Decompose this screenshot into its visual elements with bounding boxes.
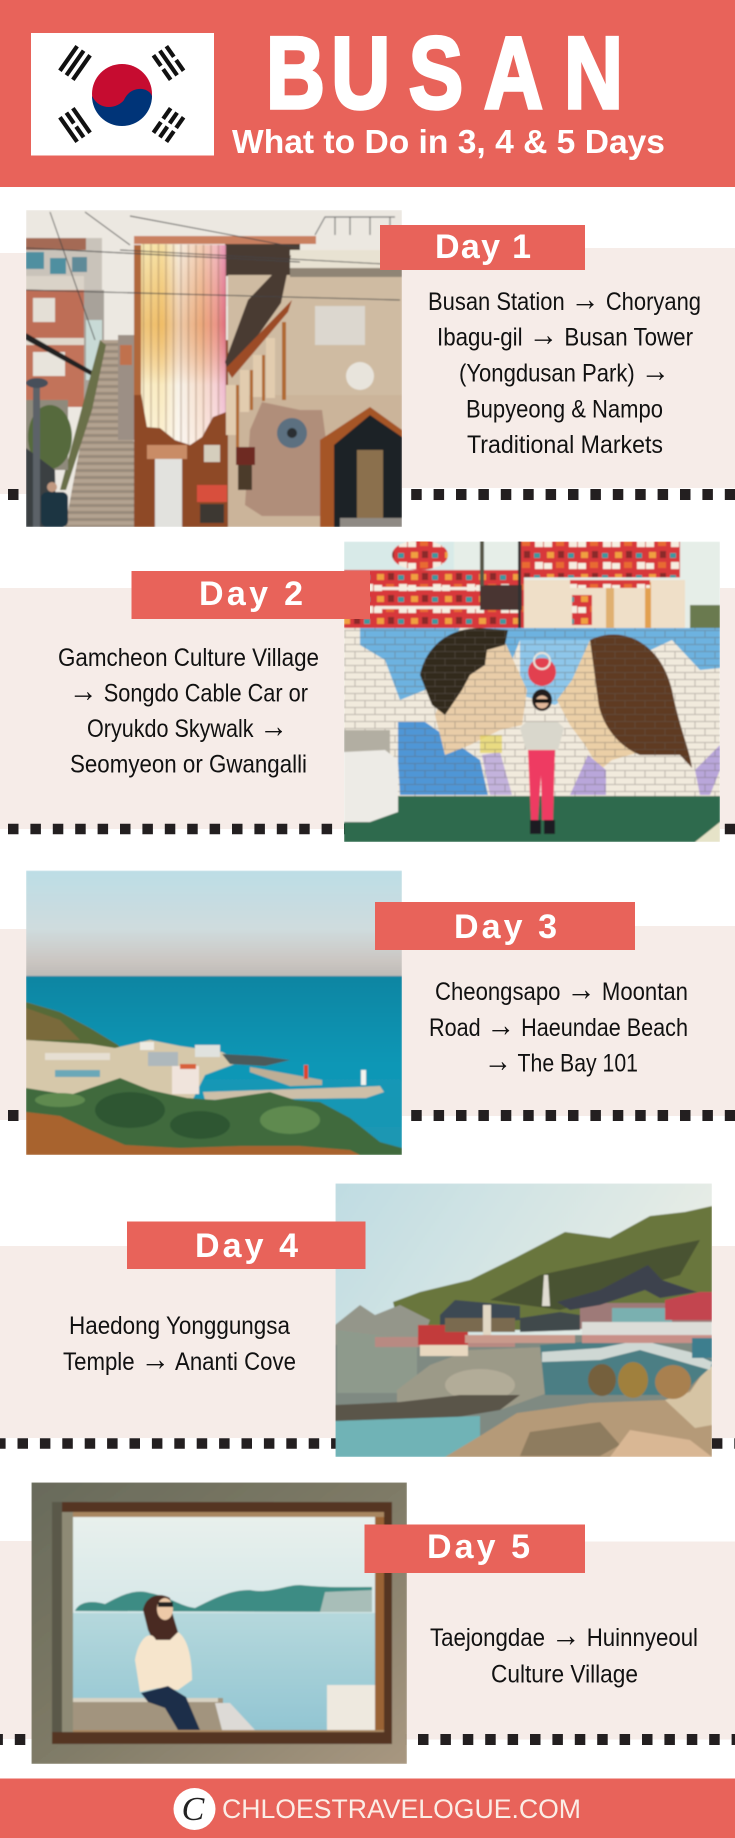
itinerary: day 2: Seomyeon or Gwangalli	[70, 750, 307, 778]
photo: Haedong Yonggungsa temple	[335, 1183, 712, 1457]
itinerary: day 2: → Songdo Cable Car or	[69, 672, 308, 708]
banner: day 3	[375, 902, 635, 950]
itinerary: day 4	[63, 1312, 296, 1377]
itinerary: day 3: Cheongsapo → Moontan	[435, 970, 688, 1007]
photo: Taejongdae window view	[31, 1482, 407, 1764]
itinerary: day 5: Taejongdae → Huinnyeoul	[430, 1616, 698, 1653]
banner: day 2: Day 2	[199, 575, 303, 613]
icon: South Korean flag	[31, 33, 214, 156]
banner: day 1	[380, 225, 585, 270]
website address: CHLOESTRAVELOGUE.COM	[222, 1794, 581, 1824]
title: BUSAN	[266, 15, 623, 130]
icon: site logo: C	[182, 1791, 205, 1828]
banner: day 4	[127, 1222, 366, 1269]
photo: Choryang Ibagu-gil	[26, 210, 402, 527]
itinerary: day 2: Gamcheon Culture Village	[58, 644, 319, 672]
itinerary: day 1: (Yongdusan Park) →	[459, 352, 670, 388]
header	[0, 0, 735, 187]
icon: site logo	[174, 1788, 216, 1830]
itinerary: day 1: Traditional Markets	[467, 431, 663, 459]
itinerary: day 1	[428, 280, 701, 459]
panel: day 1	[0, 210, 735, 527]
panel: day 4	[0, 1183, 735, 1457]
itinerary: day 3: Road → Haeundae Beach	[429, 1006, 688, 1043]
panel: day 5	[0, 1482, 735, 1764]
photo: Cheongsapo coast	[26, 870, 402, 1155]
banner: day 2	[132, 571, 370, 619]
itinerary: day 1: Busan Station → Choryang	[428, 280, 701, 317]
itinerary: day 5: Culture Village	[491, 1660, 638, 1688]
itinerary: day 3	[429, 970, 688, 1078]
banner: day 5: Day 5	[427, 1528, 530, 1566]
panel: day 2	[0, 540, 735, 842]
subtitle: What to Do in 3, 4 & 5 Days	[232, 123, 665, 160]
itinerary: day 4: Haedong Yonggungsa	[69, 1312, 290, 1340]
itinerary: day 1: Ibagu-gil → Busan Tower	[437, 316, 693, 352]
itinerary: day 2: Oryukdo Skywalk →	[87, 707, 288, 744]
itinerary: day 3: → The Bay 101	[484, 1042, 638, 1078]
banner: day 4: Day 4	[195, 1227, 298, 1265]
banner: day 5	[364, 1524, 585, 1573]
panel: day 3	[0, 870, 735, 1155]
banner: day 3: Day 3	[454, 908, 557, 946]
footer	[0, 1778, 735, 1838]
banner: day 1: Day 1	[435, 228, 531, 266]
photo: Gamcheon mural	[344, 540, 720, 842]
itinerary: day 2	[58, 644, 319, 778]
itinerary: day 4: Temple → Ananti Cove	[63, 1340, 296, 1377]
itinerary: day 1: Bupyeong & Nampo	[466, 396, 663, 424]
itinerary: day 5	[430, 1616, 698, 1688]
